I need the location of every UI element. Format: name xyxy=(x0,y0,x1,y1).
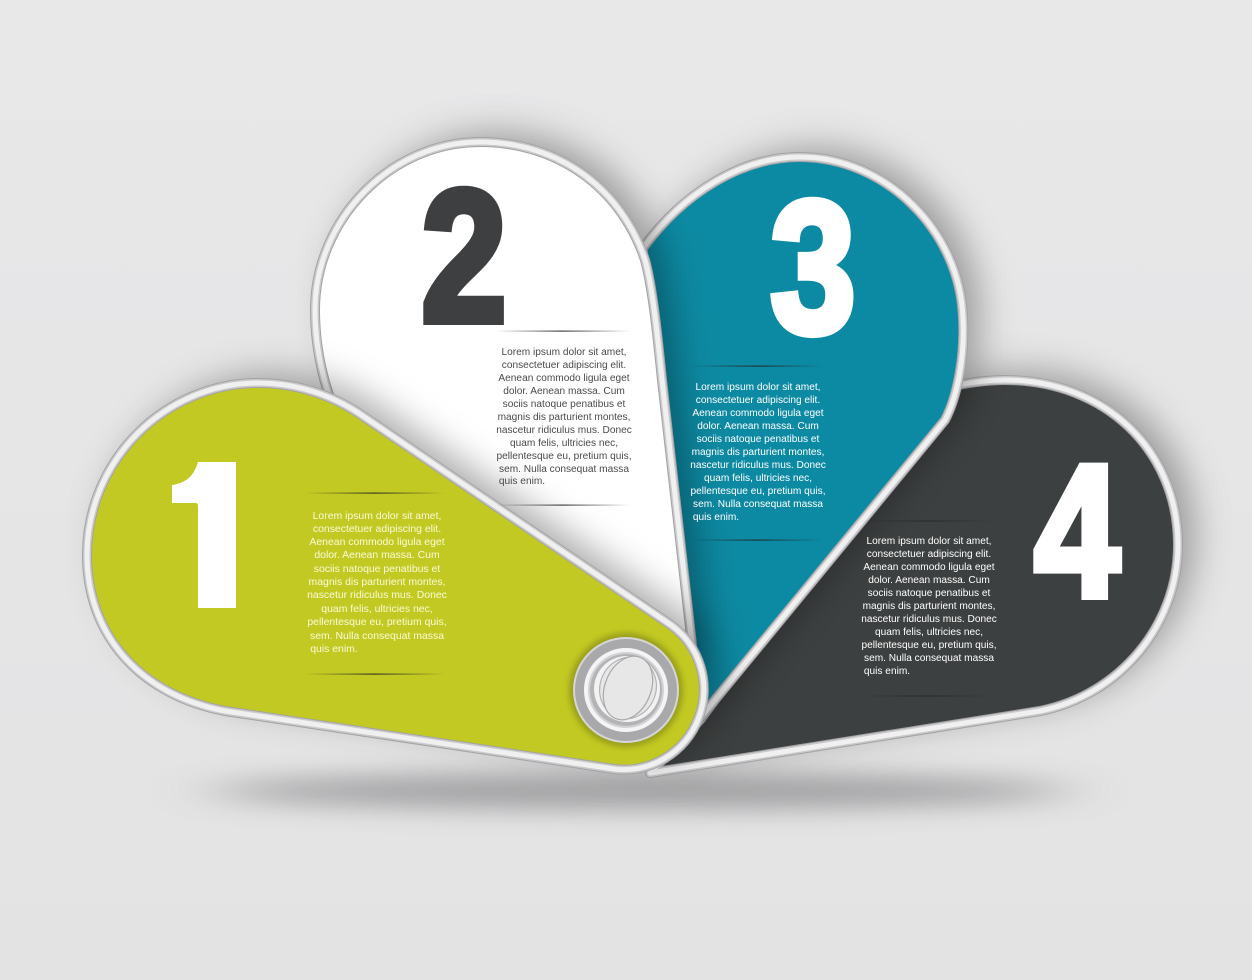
text block 4: sem. Nulla consequat massa xyxy=(864,653,994,664)
text block 1: consectetuer adipiscing elit. xyxy=(313,524,441,535)
text block 2 xyxy=(496,347,632,487)
icon: pivot eyelet xyxy=(569,633,683,747)
text block 3: dolor. Aenean massa. Cum xyxy=(697,421,819,432)
text panel 3 xyxy=(690,366,826,541)
text block 1: quam felis, ultricies nec, xyxy=(321,604,433,615)
text block 3: quis enim. xyxy=(693,512,739,523)
text block 2: Lorem ipsum dolor sit amet, xyxy=(502,347,626,358)
panel: petal 1 green xyxy=(87,383,704,770)
text block 2: magnis dis parturient montes, xyxy=(498,412,630,423)
text block 3: quam felis, ultricies nec, xyxy=(704,473,812,484)
text block 4: pellentesque eu, pretium quis, xyxy=(861,640,997,651)
text block 2: Aenean commodo ligula eget xyxy=(498,373,630,384)
text block 4: dolor. Aenean massa. Cum xyxy=(868,575,990,586)
text panel 2 xyxy=(495,330,632,506)
number 3: 3 xyxy=(770,163,856,373)
text block 1: sem. Nulla consequat massa xyxy=(310,631,444,642)
infographic canvas xyxy=(82,114,1216,826)
text block 1: Aenean commodo ligula eget xyxy=(309,537,445,548)
text block 2: sem. Nulla consequat massa xyxy=(499,464,629,475)
text block 3: magnis dis parturient montes, xyxy=(692,447,824,458)
text block 3: sociis natoque penatibus et xyxy=(697,434,820,445)
text block 1: nascetur ridiculus mus. Donec xyxy=(307,590,447,601)
text block 1 xyxy=(307,511,447,655)
text block 3: consectetuer adipiscing elit. xyxy=(696,395,820,406)
text block 4: sociis natoque penatibus et xyxy=(868,588,991,599)
panel: petal 4 dark xyxy=(650,380,1178,773)
text block 3: pellentesque eu, pretium quis, xyxy=(690,486,826,497)
text block 1: dolor. Aenean massa. Cum xyxy=(314,550,440,561)
text block 4: quis enim. xyxy=(864,666,910,677)
text block 1: pellentesque eu, pretium quis, xyxy=(307,617,447,628)
text block 2: consectetuer adipiscing elit. xyxy=(502,360,626,371)
number 2: 2 xyxy=(421,152,507,362)
text block 4: Lorem ipsum dolor sit amet, xyxy=(867,536,991,547)
ground shadow xyxy=(210,773,1070,809)
text block 2: quam felis, ultricies nec, xyxy=(510,438,618,449)
text block 1: magnis dis parturient montes, xyxy=(309,577,445,588)
text block 3: Aenean commodo ligula eget xyxy=(692,408,824,419)
text panel 1 xyxy=(305,492,447,675)
text block 4 xyxy=(861,536,997,677)
text block 1: sociis natoque penatibus et xyxy=(314,564,440,575)
text panel 4 xyxy=(860,520,997,696)
text block 1: quis enim. xyxy=(310,644,358,655)
number 1: 1 xyxy=(171,435,257,645)
text block 4: quam felis, ultricies nec, xyxy=(875,627,983,638)
text block 2: quis enim. xyxy=(499,476,545,487)
text block 4: magnis dis parturient montes, xyxy=(863,601,995,612)
text block 3: Lorem ipsum dolor sit amet, xyxy=(696,382,820,393)
text block 3: sem. Nulla consequat massa xyxy=(693,499,823,510)
text block 4: nascetur ridiculus mus. Donec xyxy=(861,614,997,625)
text block 3 xyxy=(690,382,826,523)
panel: petal 3 teal xyxy=(640,157,963,718)
text block 4: consectetuer adipiscing elit. xyxy=(867,549,991,560)
text block 2: nascetur ridiculus mus. Donec xyxy=(496,425,632,436)
panel: petal 2 white xyxy=(315,142,692,700)
text block 2: pellentesque eu, pretium quis, xyxy=(496,451,632,462)
text block 2: dolor. Aenean massa. Cum xyxy=(503,386,625,397)
text block 4: Aenean commodo ligula eget xyxy=(863,562,995,573)
text block 1: Lorem ipsum dolor sit amet, xyxy=(313,511,441,522)
number 4: 4 xyxy=(1034,427,1120,637)
text block 2: sociis natoque penatibus et xyxy=(503,399,626,410)
text block 3: nascetur ridiculus mus. Donec xyxy=(690,460,826,471)
